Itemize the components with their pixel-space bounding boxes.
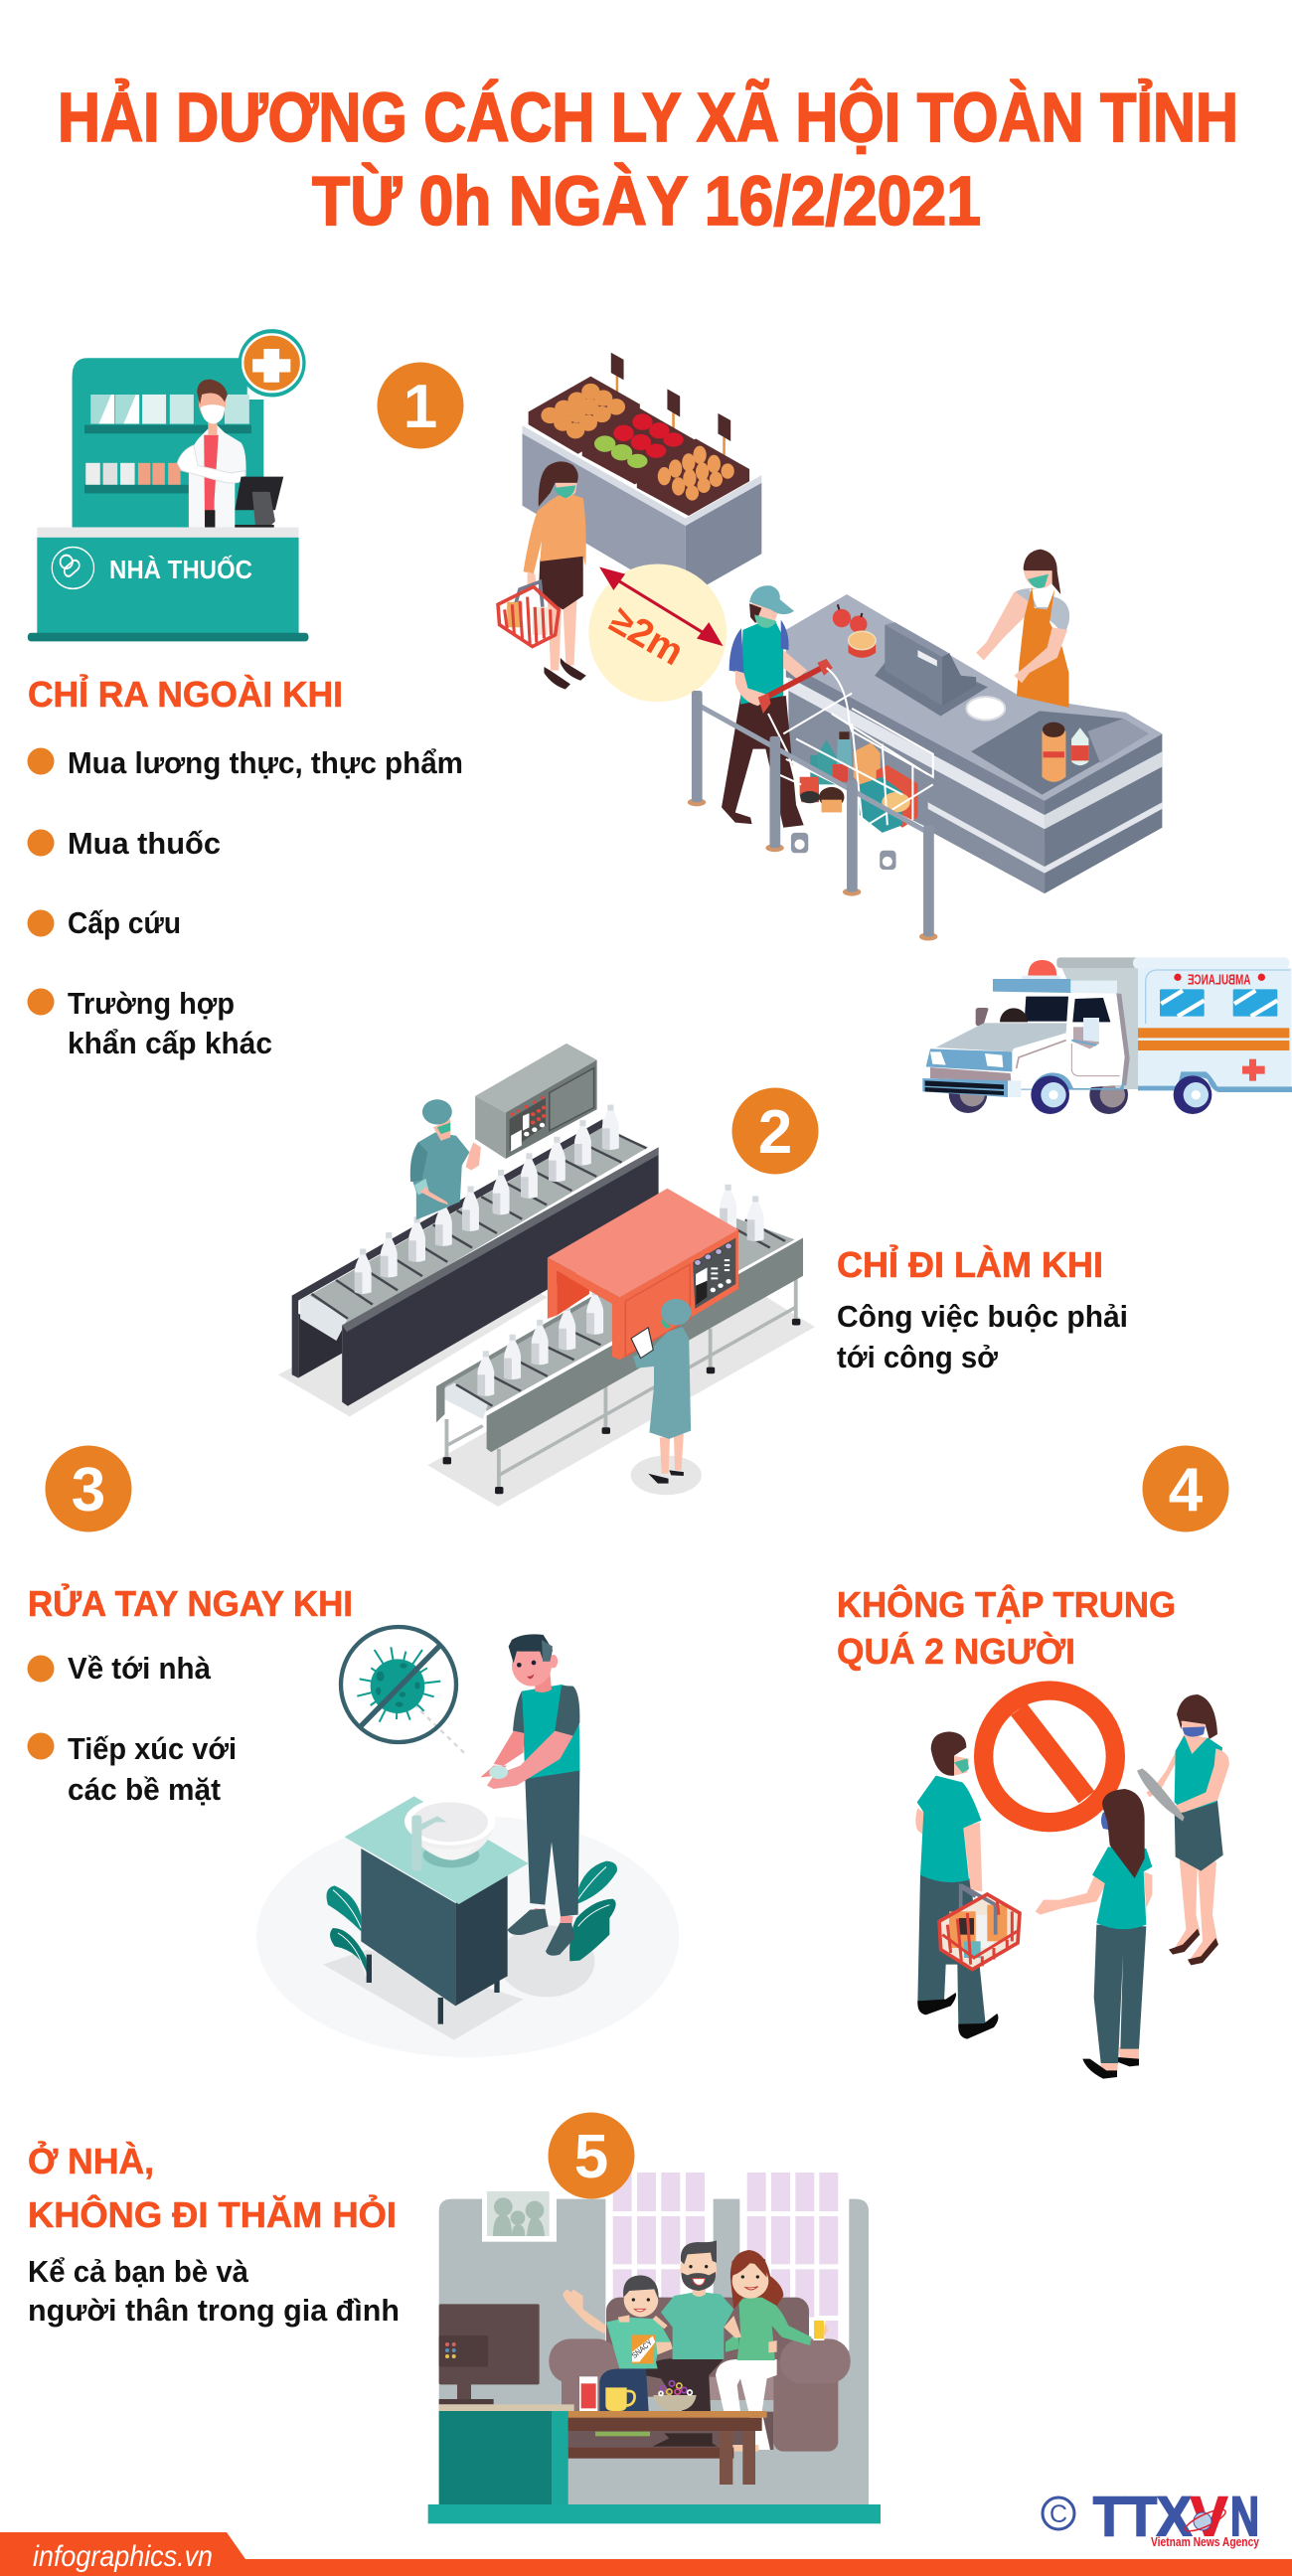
- plants: [326, 1861, 617, 1976]
- man: [480, 1634, 579, 1956]
- boy with snack: SNACY: [630, 2337, 654, 2360]
- number badge 5: 5: [574, 2123, 608, 2191]
- illustration: pharmacy: [28, 331, 309, 641]
- illustration: pharmacy: NHÀ THUỐC: [109, 555, 252, 584]
- queue barrier: [688, 691, 937, 941]
- text: stay home note: [28, 2254, 400, 2328]
- checkout counter: [786, 594, 1162, 893]
- number badge 1: [378, 362, 463, 449]
- list: going out reasons: Trường hợp: [68, 986, 235, 1021]
- number badge 1: 1: [404, 373, 437, 441]
- heading: no gathering: QUÁ 2 NGƯỜI: [837, 1630, 1075, 1672]
- cab: [922, 960, 1130, 1097]
- TTXVN logo: TTX: [1093, 2485, 1192, 2547]
- 2m distance marker: ≥2m: [602, 598, 691, 674]
- cashier: [976, 550, 1069, 708]
- TTXVN logo: C: [1050, 2500, 1067, 2528]
- tv cabinet: [439, 2404, 574, 2504]
- text: stay home note: người thân trong gia đình: [28, 2293, 400, 2328]
- man with basket: [915, 1731, 1020, 2039]
- heading: stay home: KHÔNG ĐI THĂM HỎI: [28, 2193, 397, 2235]
- virus prohibited icon: [341, 1627, 467, 1756]
- TTXVN logo: V: [1191, 2485, 1227, 2547]
- number badge 5: [549, 2113, 634, 2198]
- list: wash hands moments: Về tới nhà: [68, 1651, 212, 1686]
- 2m distance marker: [588, 564, 727, 702]
- sofa: [549, 2298, 851, 2452]
- illustration: man washing hands: [256, 1627, 679, 2057]
- room wall: [439, 2199, 869, 2504]
- list: going out reasons: Cấp cứu: [68, 905, 181, 940]
- list: going out reasons: Mua thuốc: [68, 826, 221, 861]
- illustration: no gathering of three people: [915, 1690, 1229, 2079]
- illustration: factory conveyor lines: [278, 1044, 815, 1507]
- text: work condition: tới công sở: [837, 1340, 999, 1374]
- footer bar: infographics.vn: [33, 2540, 213, 2573]
- number badge 2: [731, 1087, 819, 1175]
- family photo: [482, 2186, 557, 2242]
- wash stand: [345, 1796, 529, 2024]
- footer bar: [0, 2532, 1292, 2576]
- illustration: family in living room: [428, 2165, 881, 2523]
- text: stay home note: Kể cả bạn bè và: [28, 2254, 249, 2289]
- snacks and drinks: [579, 2376, 697, 2411]
- number badge 2: 2: [758, 1098, 792, 1167]
- list: going out reasons: Mua lương thực, thực phẩm: [68, 745, 463, 780]
- heading: no gathering: KHÔNG TẬP TRUNG: [837, 1583, 1176, 1625]
- floor strip: [428, 2504, 881, 2523]
- worker with clipboard: [631, 1299, 692, 1484]
- number badge 4: [1143, 1445, 1228, 1532]
- heading: wash hands: RỬA TAY NGAY KHI: [28, 1582, 353, 1624]
- ground: [256, 1816, 679, 2057]
- list: going out reasons: khẩn cấp khác: [68, 1026, 272, 1060]
- number badge 3: [46, 1445, 131, 1532]
- prohibition sign: [984, 1690, 1115, 1823]
- father: [644, 2240, 741, 2447]
- list: wash hands moments: Tiếp xúc với: [68, 1731, 237, 1766]
- list: wash hands moments: các bề mặt: [68, 1772, 221, 1807]
- heading: no gathering: [837, 1583, 1176, 1672]
- text: work condition: [837, 1299, 1128, 1374]
- TTXVN logo: N: [1230, 2485, 1259, 2547]
- woman with long hair: [1036, 1789, 1152, 2079]
- fruit stand: [523, 353, 761, 602]
- heading: going to work: CHỈ ĐI LÀM KHI: [837, 1244, 1103, 1285]
- floor shadows: [278, 1264, 815, 1507]
- upper conveyor: [292, 1119, 659, 1406]
- coffee table: [568, 2411, 767, 2485]
- ambulance box: [1056, 957, 1292, 1092]
- bottles on upper conveyor: [355, 1105, 619, 1294]
- windows: [605, 2165, 849, 2350]
- filling machine: [475, 1044, 597, 1159]
- illustration: ambulance: [922, 957, 1292, 1114]
- title: [58, 78, 1238, 240]
- woman with tablet: [1137, 1694, 1229, 1965]
- bottles on lower conveyor: [477, 1185, 764, 1396]
- shopper with cart: [722, 585, 933, 870]
- ambulance box: AMBULANCE: [1188, 973, 1250, 989]
- TTXVN logo: [1043, 2485, 1260, 2549]
- number badge 4: 4: [1169, 1456, 1204, 1525]
- television: [439, 2304, 540, 2404]
- list: wash hands moments: [28, 1651, 237, 1807]
- boy with snack: [563, 2275, 673, 2412]
- TTXVN logo: Vietnam News Agency: [1151, 2534, 1260, 2549]
- worker at upper conveyor: [410, 1099, 481, 1219]
- woman with basket: [498, 461, 586, 689]
- text: work condition: Công việc buộc phải: [837, 1299, 1128, 1334]
- number badge 3: 3: [72, 1456, 105, 1525]
- heading: stay home: Ở NHÀ,: [28, 2140, 154, 2181]
- heading: stay home: [28, 2140, 397, 2235]
- illustration: supermarket checkout with 2m distance: [498, 353, 1162, 941]
- orange machine: [548, 1189, 738, 1360]
- list: going out reasons: [28, 745, 463, 1060]
- title: TỪ 0h NGÀY 16/2/2021: [312, 162, 981, 240]
- woman: [716, 2250, 828, 2452]
- heading: going out: CHỈ RA NGOÀI KHI: [28, 674, 343, 715]
- lower conveyor: [436, 1213, 803, 1494]
- front wheels: [1021, 1072, 1211, 1114]
- rear wheels behind body: [949, 1074, 1128, 1114]
